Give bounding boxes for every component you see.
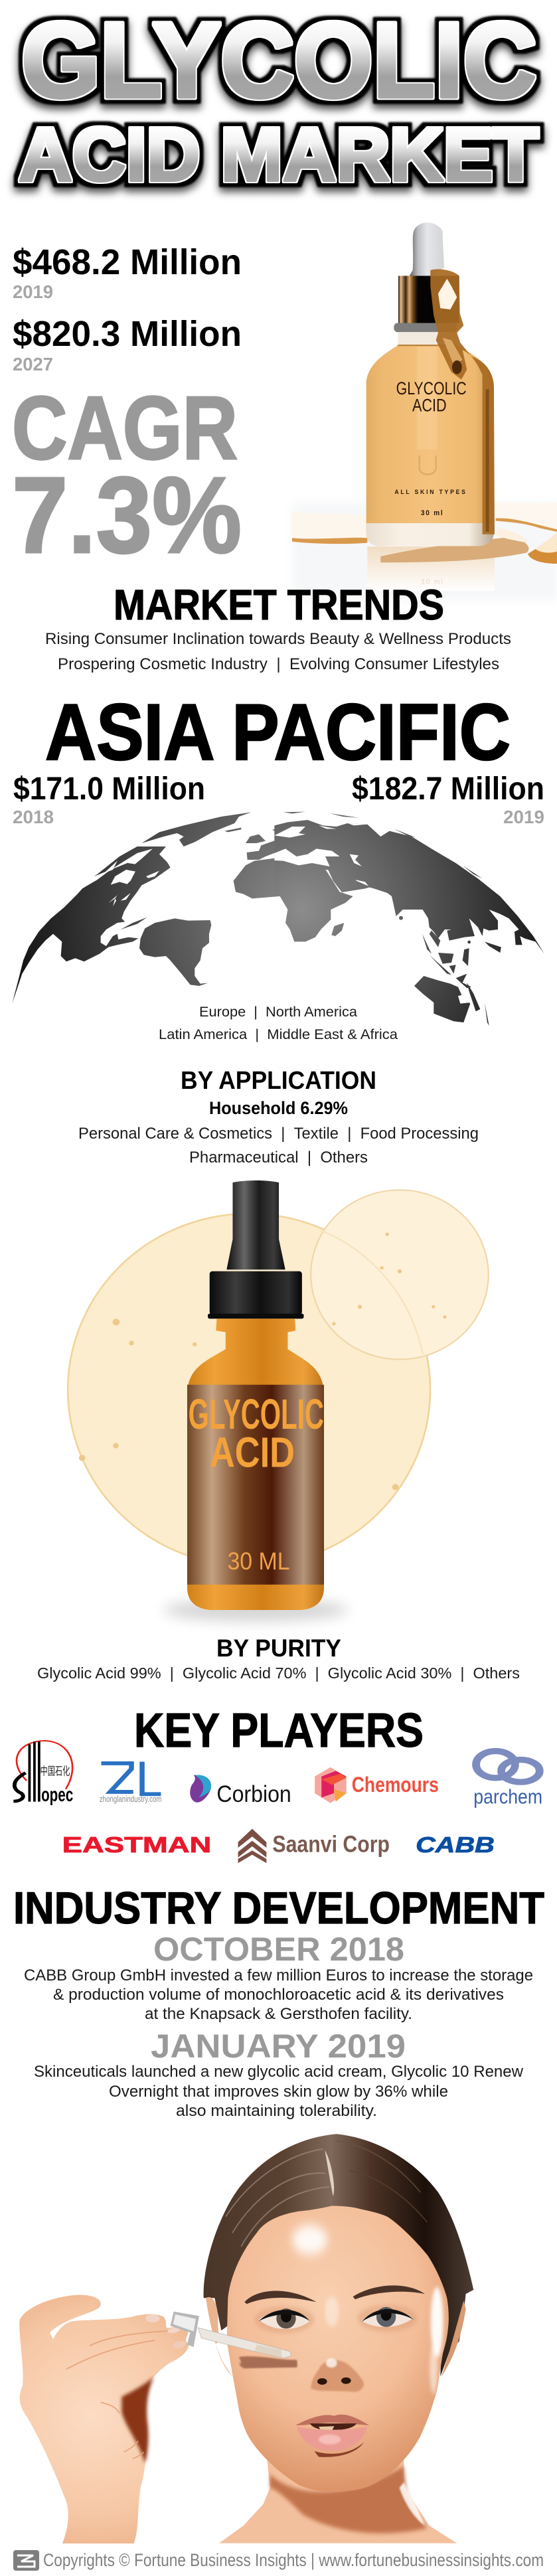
heading: market trends: MARKET TRENDS [114,581,444,629]
logo: Parchem [473,1751,542,1809]
text: application segments line 1: Personal Care & Cosmetics | Textile | Food Processing [78,1125,479,1143]
heading: key players: KEY PLAYERS [134,1704,424,1757]
heading: Asia Pacific: ASIA PACIFIC [45,688,511,777]
stat: CAGR label: CAGR [12,378,238,478]
text: October 2018 development [24,1967,533,2023]
heading: by purity: BY PURITY [216,1635,341,1662]
stat: Asia Pacific 2018 value: $171.0 Million [13,771,205,807]
illustration: dropper bottle with serum circles: ACID [210,1429,295,1476]
text: market trends line 2: Prospering Cosmetic Industry | Evolving Consumer Lifestyles [58,655,499,673]
illustration: dropper bottle with serum circles: 30 ML [227,1548,290,1575]
logo: Saanvi Corp [238,1828,390,1863]
market size stats [12,242,242,576]
logo: Corbion [190,1775,291,1807]
illustration: amber serum bottle: 30 ml [421,509,443,517]
stat: 2019 year: 2019 [503,807,544,827]
icon: Fortune Business Insights logo [13,2550,39,2571]
text: January 2019 development: Overnight that improves skin glow by 36% while [109,2083,448,2101]
illustration: amber serum bottle: ACID [412,396,447,416]
text: October 2018 development: CABB Group GmbH invested a few million Euros to increase the storage [24,1967,533,1984]
stat: CAGR value: 7.3% [12,454,242,576]
text: January 2019 development [34,2063,524,2120]
logo: Eastman: EASTMAN [62,1833,211,1858]
text: January 2019 development: also maintaining tolerability. [176,2102,377,2120]
logo: CABB: CABB [416,1832,495,1858]
logo: Sinopec: 中国石化 [40,1765,70,1778]
logo: Chemours [315,1767,439,1803]
date: January 2019: JANUARY 2019 [151,2028,406,2065]
footer: copyright [13,2550,544,2571]
title line: ACID MARKET: ACID MARKET [19,113,538,197]
heading: by application: BY APPLICATION [181,1067,376,1095]
title: Glycolic Acid Market [19,1,538,197]
stat: 2027 value: $820.3 Million [13,314,242,354]
illustration: woman applying serum with dropper [19,2134,473,2543]
text: application segments line 2: Pharmaceutical | Others [189,1149,368,1167]
illustration: dropper bottle with serum circles: GLYCOLIC [189,1390,324,1438]
world map [12,812,544,1026]
text: purity segments: Glycolic Acid 99% | Glycolic Acid 70% | Glycolic Acid 30% | Others [37,1664,520,1682]
title line: GLYCOLIC: GLYCOLIC [21,1,536,120]
logo: Sinopec: opec [41,1785,73,1806]
logo: Chemours: Chemours [352,1773,439,1797]
logo: Zhonglan Industry: zhonglanindustry.com [100,1795,161,1805]
logo: Zhonglan Industry [100,1761,161,1805]
stat: 2019 value: $468.2 Million [13,242,242,282]
stat: 2018 year: 2018 [13,807,54,827]
logo: Sinopec [13,1741,73,1806]
logo: Corbion: Corbion [216,1781,291,1807]
text: October 2018 development: & production volume of monochloroacetic acid & its derivatives [53,1986,504,2004]
stat: 2027 year: 2027 [13,354,53,374]
text: other regions line 1: Europe | North America [199,1005,357,1020]
illustration: dropper bottle with serum circles [68,1180,489,1622]
illustration: amber serum bottle: GLYCOLIC [396,379,467,398]
text: market trends line 1: Rising Consumer Inclination towards Beauty & Wellness Products [45,630,511,648]
illustration: amber serum bottle: ALL SKIN TYPES [394,489,465,495]
logo: Saanvi Corp: Saanvi Corp [272,1830,390,1857]
stat: 2019 year: 2019 [13,282,53,302]
date: October 2018: OCTOBER 2018 [153,1931,404,1968]
illustration: amber serum bottle [292,222,557,601]
illustration: amber serum bottle: 30 ml [421,578,443,586]
text: October 2018 development: at the Knapsack & Gersthofen facility. [145,2005,412,2023]
stat: Asia Pacific 2019 value: $182.7 Million [352,771,544,807]
text: other regions line 2: Latin America | Middle East & Africa [159,1027,398,1042]
stat: household share: Household 6.29% [209,1098,348,1118]
text: January 2019 development: Skinceuticals launched a new glycolic acid cream, Glycolic 10 Renew [34,2063,524,2081]
logos: key players [13,1741,542,1863]
